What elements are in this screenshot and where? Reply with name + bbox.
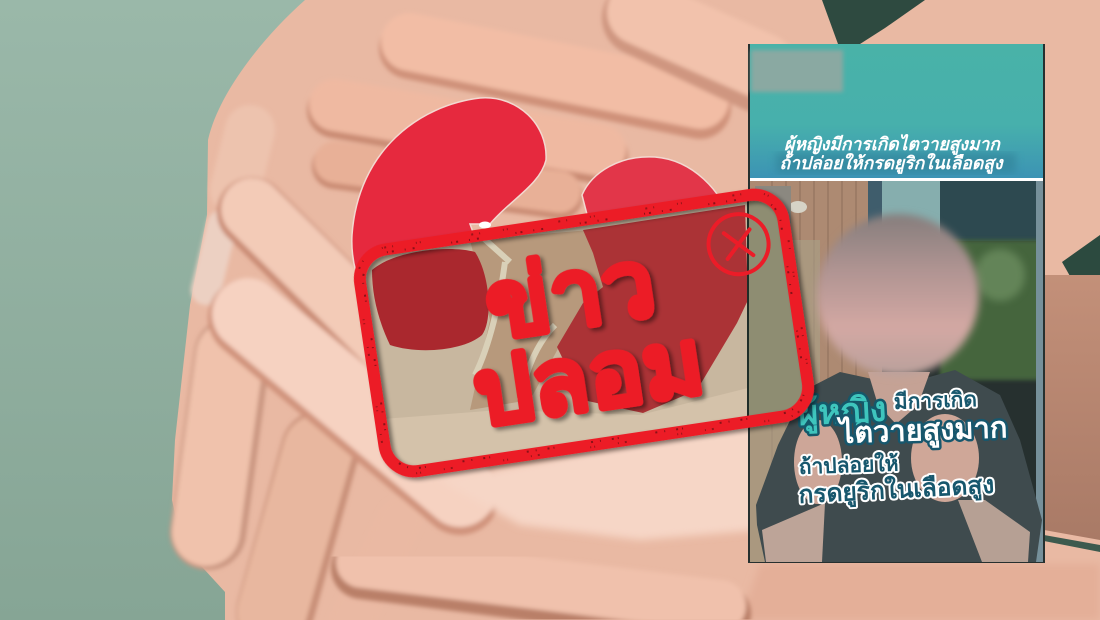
interior palm lower xyxy=(388,388,747,465)
skin right below panel xyxy=(740,564,1100,620)
interior video strip xyxy=(749,200,802,416)
dark sleeve right edge xyxy=(1062,235,1100,285)
finger: lower left 1 xyxy=(208,355,232,532)
forearm right xyxy=(958,500,1030,562)
x mark xyxy=(724,229,753,259)
video overlay text xyxy=(797,387,1008,510)
torso xyxy=(756,370,1042,562)
finger: top 3 xyxy=(335,162,560,192)
forearm right lower xyxy=(1044,275,1100,540)
overlay: has occurrence: มีการเกิด xyxy=(893,387,977,414)
blurred logo xyxy=(751,50,843,92)
ureter accent xyxy=(479,222,491,228)
speckle row 2 xyxy=(354,188,814,478)
interior kidney right xyxy=(557,205,748,413)
stamp text line 1: ข่าว xyxy=(478,230,662,359)
blue frame xyxy=(868,181,882,226)
video screenshot panel xyxy=(748,44,1045,563)
finger: top 2 shadow xyxy=(335,110,600,156)
stamp grunge xyxy=(354,188,814,478)
finger: top 3 shadow xyxy=(335,166,560,196)
fake news stamp xyxy=(354,188,814,478)
circle xyxy=(704,210,773,278)
lower wall tint xyxy=(750,240,820,562)
hand left xyxy=(794,420,842,504)
header caption band xyxy=(776,153,1016,173)
wall slats xyxy=(771,181,857,378)
sleeve sliver lower right xyxy=(1044,535,1100,552)
neck xyxy=(868,372,930,424)
finger: top 1 shadow xyxy=(410,48,700,108)
overlay: if left: ถ้าปล่อยให้ xyxy=(798,451,899,479)
forearm left xyxy=(762,503,825,562)
curtain xyxy=(882,181,940,232)
stamp border xyxy=(356,191,812,475)
blurred wall mark xyxy=(755,186,791,230)
finger: top 2 xyxy=(335,105,600,150)
wall lamp xyxy=(791,201,807,213)
video scene xyxy=(750,181,1043,562)
dark window xyxy=(940,181,1043,241)
palm: bright centre xyxy=(440,420,760,540)
finger: top 1 xyxy=(410,42,700,100)
paper kidney: left xyxy=(352,98,546,350)
hand right xyxy=(911,414,979,502)
interior base xyxy=(366,202,747,419)
panel frame xyxy=(748,44,1045,563)
interior kidney left xyxy=(372,249,489,350)
stamp x circle xyxy=(704,210,773,278)
finger: lower thumb shadow xyxy=(362,568,720,614)
back of hand xyxy=(235,130,250,190)
finger: lower left 2 xyxy=(275,450,320,612)
finger: front 2 xyxy=(248,318,460,495)
paper kidney: right xyxy=(560,157,750,415)
header caption xyxy=(779,133,1004,174)
stamp interior: darkened photo xyxy=(366,200,802,466)
overlay: uric acid: กรดยูริกในเลือดสูง xyxy=(798,470,995,510)
blurred face xyxy=(817,214,979,376)
white rule xyxy=(750,178,1043,181)
caption line 1: ผู้หญิงมีการเกิดไตวายสูงมาก xyxy=(784,133,1001,155)
finger: thumb top right xyxy=(640,18,760,75)
finger: lower thumb xyxy=(362,562,720,606)
window edge xyxy=(1036,181,1043,562)
interior video edge xyxy=(747,201,749,416)
caption line 2: ถ้าปล่อยให้กรดยูริกในเลือดสูง xyxy=(779,152,1004,174)
window lower: tree backdrop xyxy=(940,240,1043,380)
teal header xyxy=(750,44,1043,178)
finger: side sliver xyxy=(206,225,222,290)
dark sleeve top right xyxy=(822,0,925,44)
tree highlight xyxy=(975,249,1025,301)
overlay: kidney failure: ไตวายสูงมาก xyxy=(836,410,1008,451)
finger: lower left 3 xyxy=(350,520,400,620)
interior ureters xyxy=(475,235,555,400)
speckle row 1 xyxy=(359,194,809,472)
finger: front 1 xyxy=(252,212,420,378)
interior tan hollow xyxy=(470,230,610,410)
stamp text line 2: ปลอม xyxy=(467,310,710,445)
wood wall xyxy=(750,181,882,562)
overlay: women: ผู้หญิง xyxy=(797,390,887,435)
